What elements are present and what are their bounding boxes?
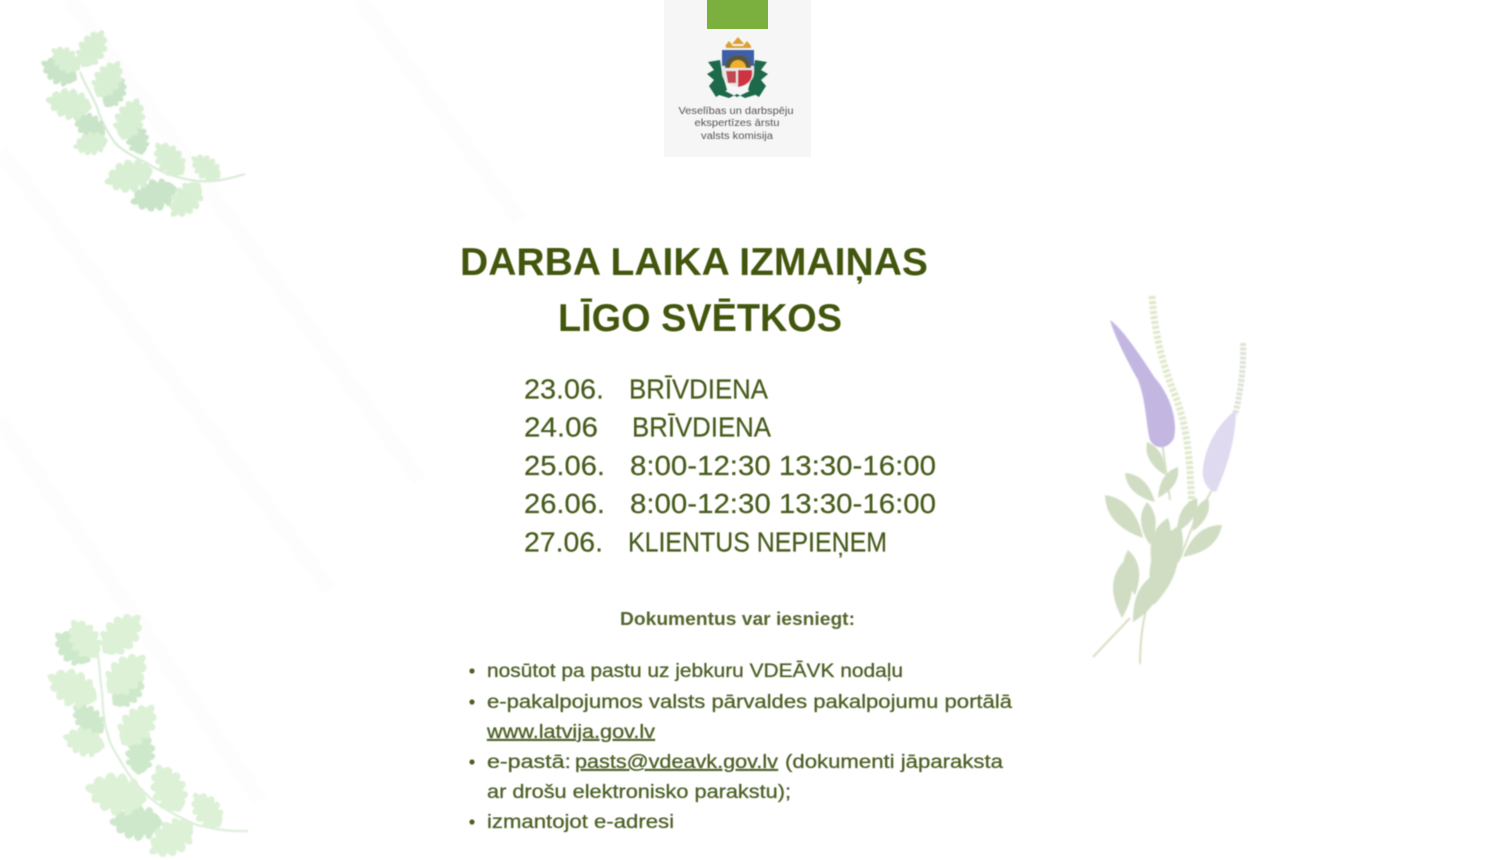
logo green bar: [707, 0, 768, 29]
schedule row 24.06: 24.06: [524, 412, 598, 442]
schedule row 25.06: 8:00-12:30 13:30-16:00: [630, 450, 936, 481]
logo caption: ekspertīzes ārstu: [694, 118, 780, 129]
schedule row 25.06: 25.06.: [524, 450, 605, 481]
schedule row 26.06: 26.06.: [524, 488, 605, 519]
schedule row 24.06: [524, 412, 771, 442]
schedule row 23.06: BRĪVDIENA: [629, 374, 768, 404]
documents list: (dokumenti jāparaksta: [785, 752, 1003, 773]
documents heading: Dokumentus var iesniegt:: [620, 609, 855, 629]
documents list: e-pastā:: [487, 752, 571, 773]
documents list: www.latvija.gov.lv: [486, 722, 656, 743]
icon: Latvian coat of arms: [707, 37, 768, 98]
green flower spike: [1152, 296, 1192, 510]
schedule row 27.06: KLIENTUS NEPIEŅEM: [628, 526, 887, 558]
decoration: lavender plant: [1093, 296, 1243, 664]
schedule row 23.06: 23.06.: [524, 374, 604, 404]
documents list: pasts@vdeavk.gov.lv: [575, 752, 779, 773]
documents list: izmantojot e-adresi: [487, 812, 674, 833]
bullet dots: [469, 668, 475, 825]
title: [460, 241, 928, 340]
schedule row 27.06: [524, 526, 887, 558]
title: DARBA LAIKA IZMAIŅAS: [460, 241, 928, 284]
logo caption: valsts komisija: [701, 131, 773, 142]
schedule row 27.06: 27.06.: [524, 526, 603, 558]
documents list: e-pakalpojumos valsts pārvaldes pakalpojumu portālā: [487, 692, 1013, 713]
schedule list: [524, 374, 936, 558]
logo panel: [664, 0, 811, 157]
schedule row 24.06: BRĪVDIENA: [632, 412, 771, 442]
title: LĪGO SVĒTKOS: [558, 297, 842, 340]
decoration: top-left oak branch: [35, 23, 245, 226]
documents list: ar drošu elektronisko parakstu);: [487, 782, 791, 803]
schedule row 26.06: 8:00-12:30 13:30-16:00: [630, 488, 936, 519]
logo caption: Veselības un darbspēju: [678, 106, 794, 117]
schedule row 23.06: [524, 374, 768, 404]
documents list: [469, 661, 1013, 833]
pale purple flower spike: [1203, 343, 1243, 492]
logo caption: [678, 106, 794, 142]
purple flower spike: [1110, 320, 1175, 447]
decoration: bottom-left oak branch: [39, 603, 248, 860]
documents list: nosūtot pa pastu uz jebkuru VDEĀVK nodaļu: [487, 661, 903, 682]
